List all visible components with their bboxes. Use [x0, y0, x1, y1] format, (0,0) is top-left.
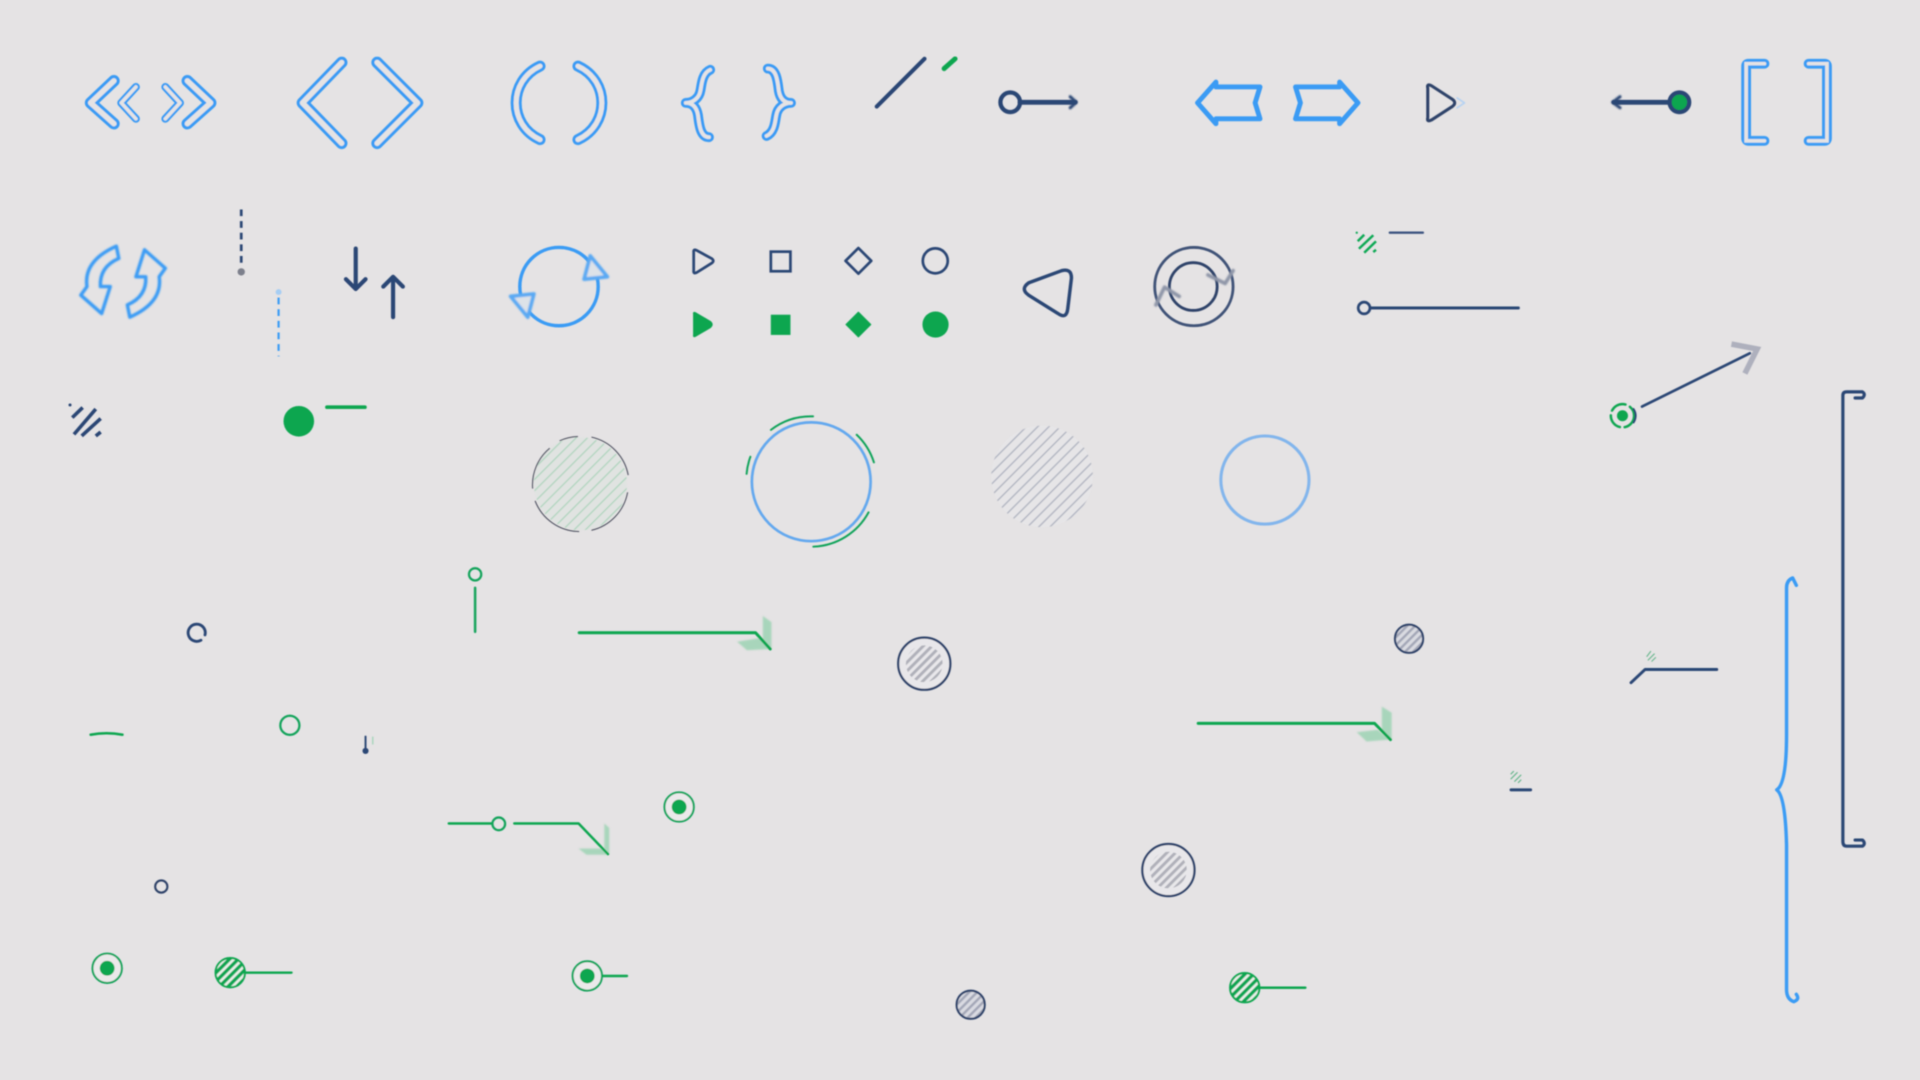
icon: curly braces — [686, 69, 791, 137]
icon: navy open ring — [188, 624, 205, 641]
arrows: down and up — [346, 249, 403, 317]
circle: grey hatch — [991, 426, 1093, 527]
circle: small hatched navy upper — [1395, 625, 1423, 653]
arrow: green dot pin pointing left — [1613, 92, 1689, 112]
icon: navy small ring — [155, 880, 167, 893]
icon: filled square — [771, 315, 790, 335]
line: dashed navy with end dot — [238, 209, 245, 276]
icon: play triangle with ghost — [1428, 85, 1464, 121]
icon: green hatch dot with line right — [1230, 973, 1305, 1002]
line: dashed blue with end dot — [276, 289, 282, 356]
icon: double ring with cycle arrows — [1155, 247, 1233, 326]
icon: outline circle — [923, 248, 948, 273]
circle: pale blue ring — [1221, 436, 1309, 524]
icon: large chevrons — [302, 62, 418, 143]
circle: grey hatch ring upper — [898, 638, 950, 690]
icon: refresh arrows outline — [81, 246, 165, 317]
icon: green hatch dot with line left — [216, 958, 291, 987]
icon: block arrows left and right — [1198, 82, 1358, 124]
line: green vertical pin — [469, 568, 481, 632]
icon: slash line with green tick — [877, 59, 955, 107]
icon: green hatch swatch with line — [1356, 232, 1423, 253]
arrow: green line right with ghost head — [1198, 707, 1392, 741]
circle: blue ring with green arcs — [747, 416, 874, 547]
icon: large rounded triangle — [1024, 270, 1071, 316]
circle: small hatched navy lower — [957, 991, 985, 1019]
line: ring pin horizontal — [1358, 302, 1518, 314]
icon: green target with line — [573, 961, 627, 991]
icon: filled circle — [922, 311, 949, 338]
icon: navy small pin with tick — [362, 737, 373, 754]
icon: filled diamond — [846, 312, 871, 337]
arrow: green pin elbow with ghost head — [449, 817, 609, 855]
circle: grey hatch ring lower — [1142, 844, 1194, 896]
icon: tiny hatch with navy dash — [1511, 771, 1531, 790]
icon: cycle circle with arrowheads — [511, 247, 607, 326]
icon: green dot with line — [283, 406, 365, 437]
arrow: target with long arrow — [1611, 344, 1757, 427]
circle: green hatch with dashed outline — [533, 437, 628, 531]
icon: filled play — [694, 312, 712, 337]
arrow: ring pin pointing right — [1000, 92, 1076, 112]
icon: parentheses — [516, 66, 602, 140]
line: navy elbow with small hatch — [1631, 651, 1717, 683]
icon: square brackets — [1746, 64, 1827, 141]
line: green short tick — [91, 733, 122, 735]
icon: green target — [664, 792, 694, 822]
brace: tall blue — [1777, 578, 1798, 1002]
icon: outline square — [771, 252, 790, 271]
arrow: green long line with ghost head — [579, 616, 771, 650]
icon: outline play — [694, 250, 713, 273]
icon: green target lower left — [92, 954, 122, 983]
icon: double chevrons — [91, 81, 211, 124]
icon: outline diamond — [846, 248, 871, 274]
icon: navy hatch swatch — [69, 403, 101, 436]
bracket: tall navy — [1843, 392, 1864, 846]
icon: green small ring — [280, 716, 299, 735]
